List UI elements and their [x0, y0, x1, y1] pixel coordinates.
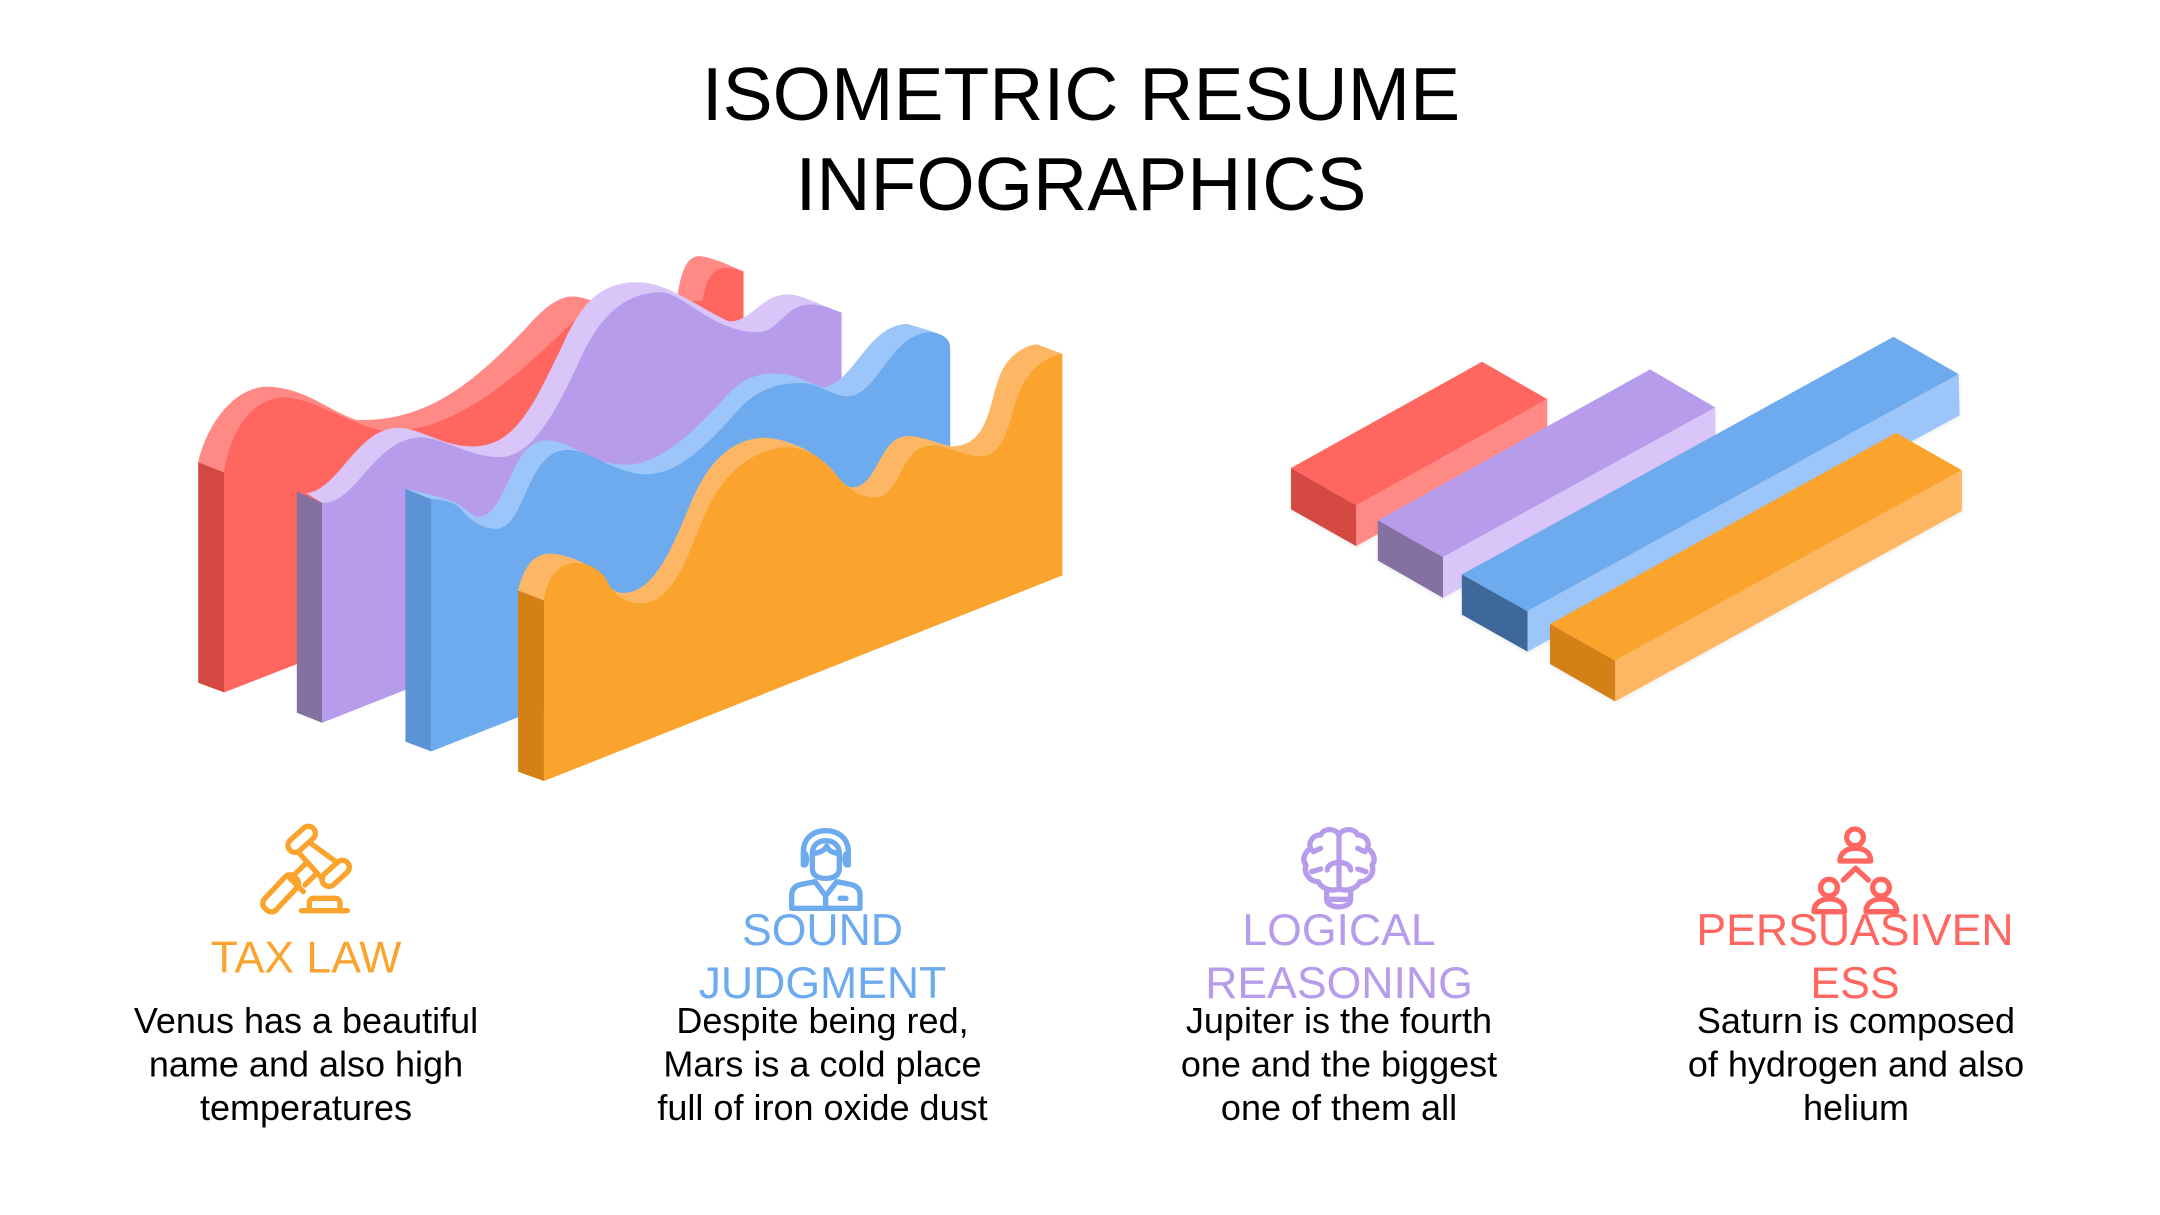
- chart: isometric wave areas: [198, 256, 1062, 781]
- description: Despite being red,: [676, 1000, 969, 1041]
- bar: red: [1291, 362, 1547, 546]
- heading: REASONING: [1205, 959, 1473, 1008]
- icon: gavel: [260, 823, 352, 915]
- heading: [699, 906, 946, 1008]
- heading: ESS: [1810, 959, 1900, 1008]
- column: tax law: [134, 823, 478, 1128]
- wave: red: [198, 256, 744, 692]
- heading: [1696, 906, 2014, 1008]
- description: Saturn is composed: [1697, 1000, 2015, 1041]
- description: [134, 1000, 478, 1128]
- wave: blue: [405, 324, 950, 751]
- description: [1688, 1000, 2024, 1128]
- wave: orange: [518, 344, 1062, 781]
- column: persuasiveness: [1688, 829, 2024, 1128]
- heading: [1205, 906, 1473, 1008]
- title: [702, 52, 1460, 226]
- column: sound judgment: [657, 831, 988, 1128]
- heading: LOGICAL: [1242, 906, 1436, 955]
- bar: orange: [1550, 433, 1962, 701]
- chart: isometric bars: [1291, 337, 1962, 701]
- bar: blue: [1462, 337, 1960, 652]
- description: helium: [1803, 1087, 1909, 1128]
- icon: people network: [1814, 829, 1897, 912]
- description: one of them all: [1221, 1087, 1457, 1128]
- description: Mars is a cold place: [663, 1044, 982, 1084]
- description: one and the biggest: [1181, 1044, 1497, 1084]
- description: [657, 1000, 988, 1128]
- heading: JUDGMENT: [699, 959, 946, 1008]
- title: INFOGRAPHICS: [796, 142, 1366, 226]
- description: of hydrogen and also: [1688, 1044, 2024, 1084]
- heading: SOUND: [742, 906, 903, 955]
- heading: PERSUASIVEN: [1696, 906, 2014, 955]
- description: temperatures: [200, 1087, 412, 1128]
- description: [1181, 1000, 1497, 1128]
- description: Jupiter is the fourth: [1186, 1000, 1492, 1041]
- icon: brain bulb: [1304, 830, 1374, 907]
- description: full of iron oxide dust: [657, 1087, 988, 1128]
- wave: purple: [297, 282, 842, 723]
- icon: judge person: [792, 831, 860, 908]
- title: ISOMETRIC RESUME: [702, 52, 1460, 136]
- bar: purple: [1378, 369, 1715, 598]
- column: logical reasoning: [1181, 830, 1497, 1128]
- heading: TAX LAW: [211, 934, 401, 982]
- description: Venus has a beautiful: [134, 1000, 478, 1041]
- description: name and also high: [149, 1044, 463, 1084]
